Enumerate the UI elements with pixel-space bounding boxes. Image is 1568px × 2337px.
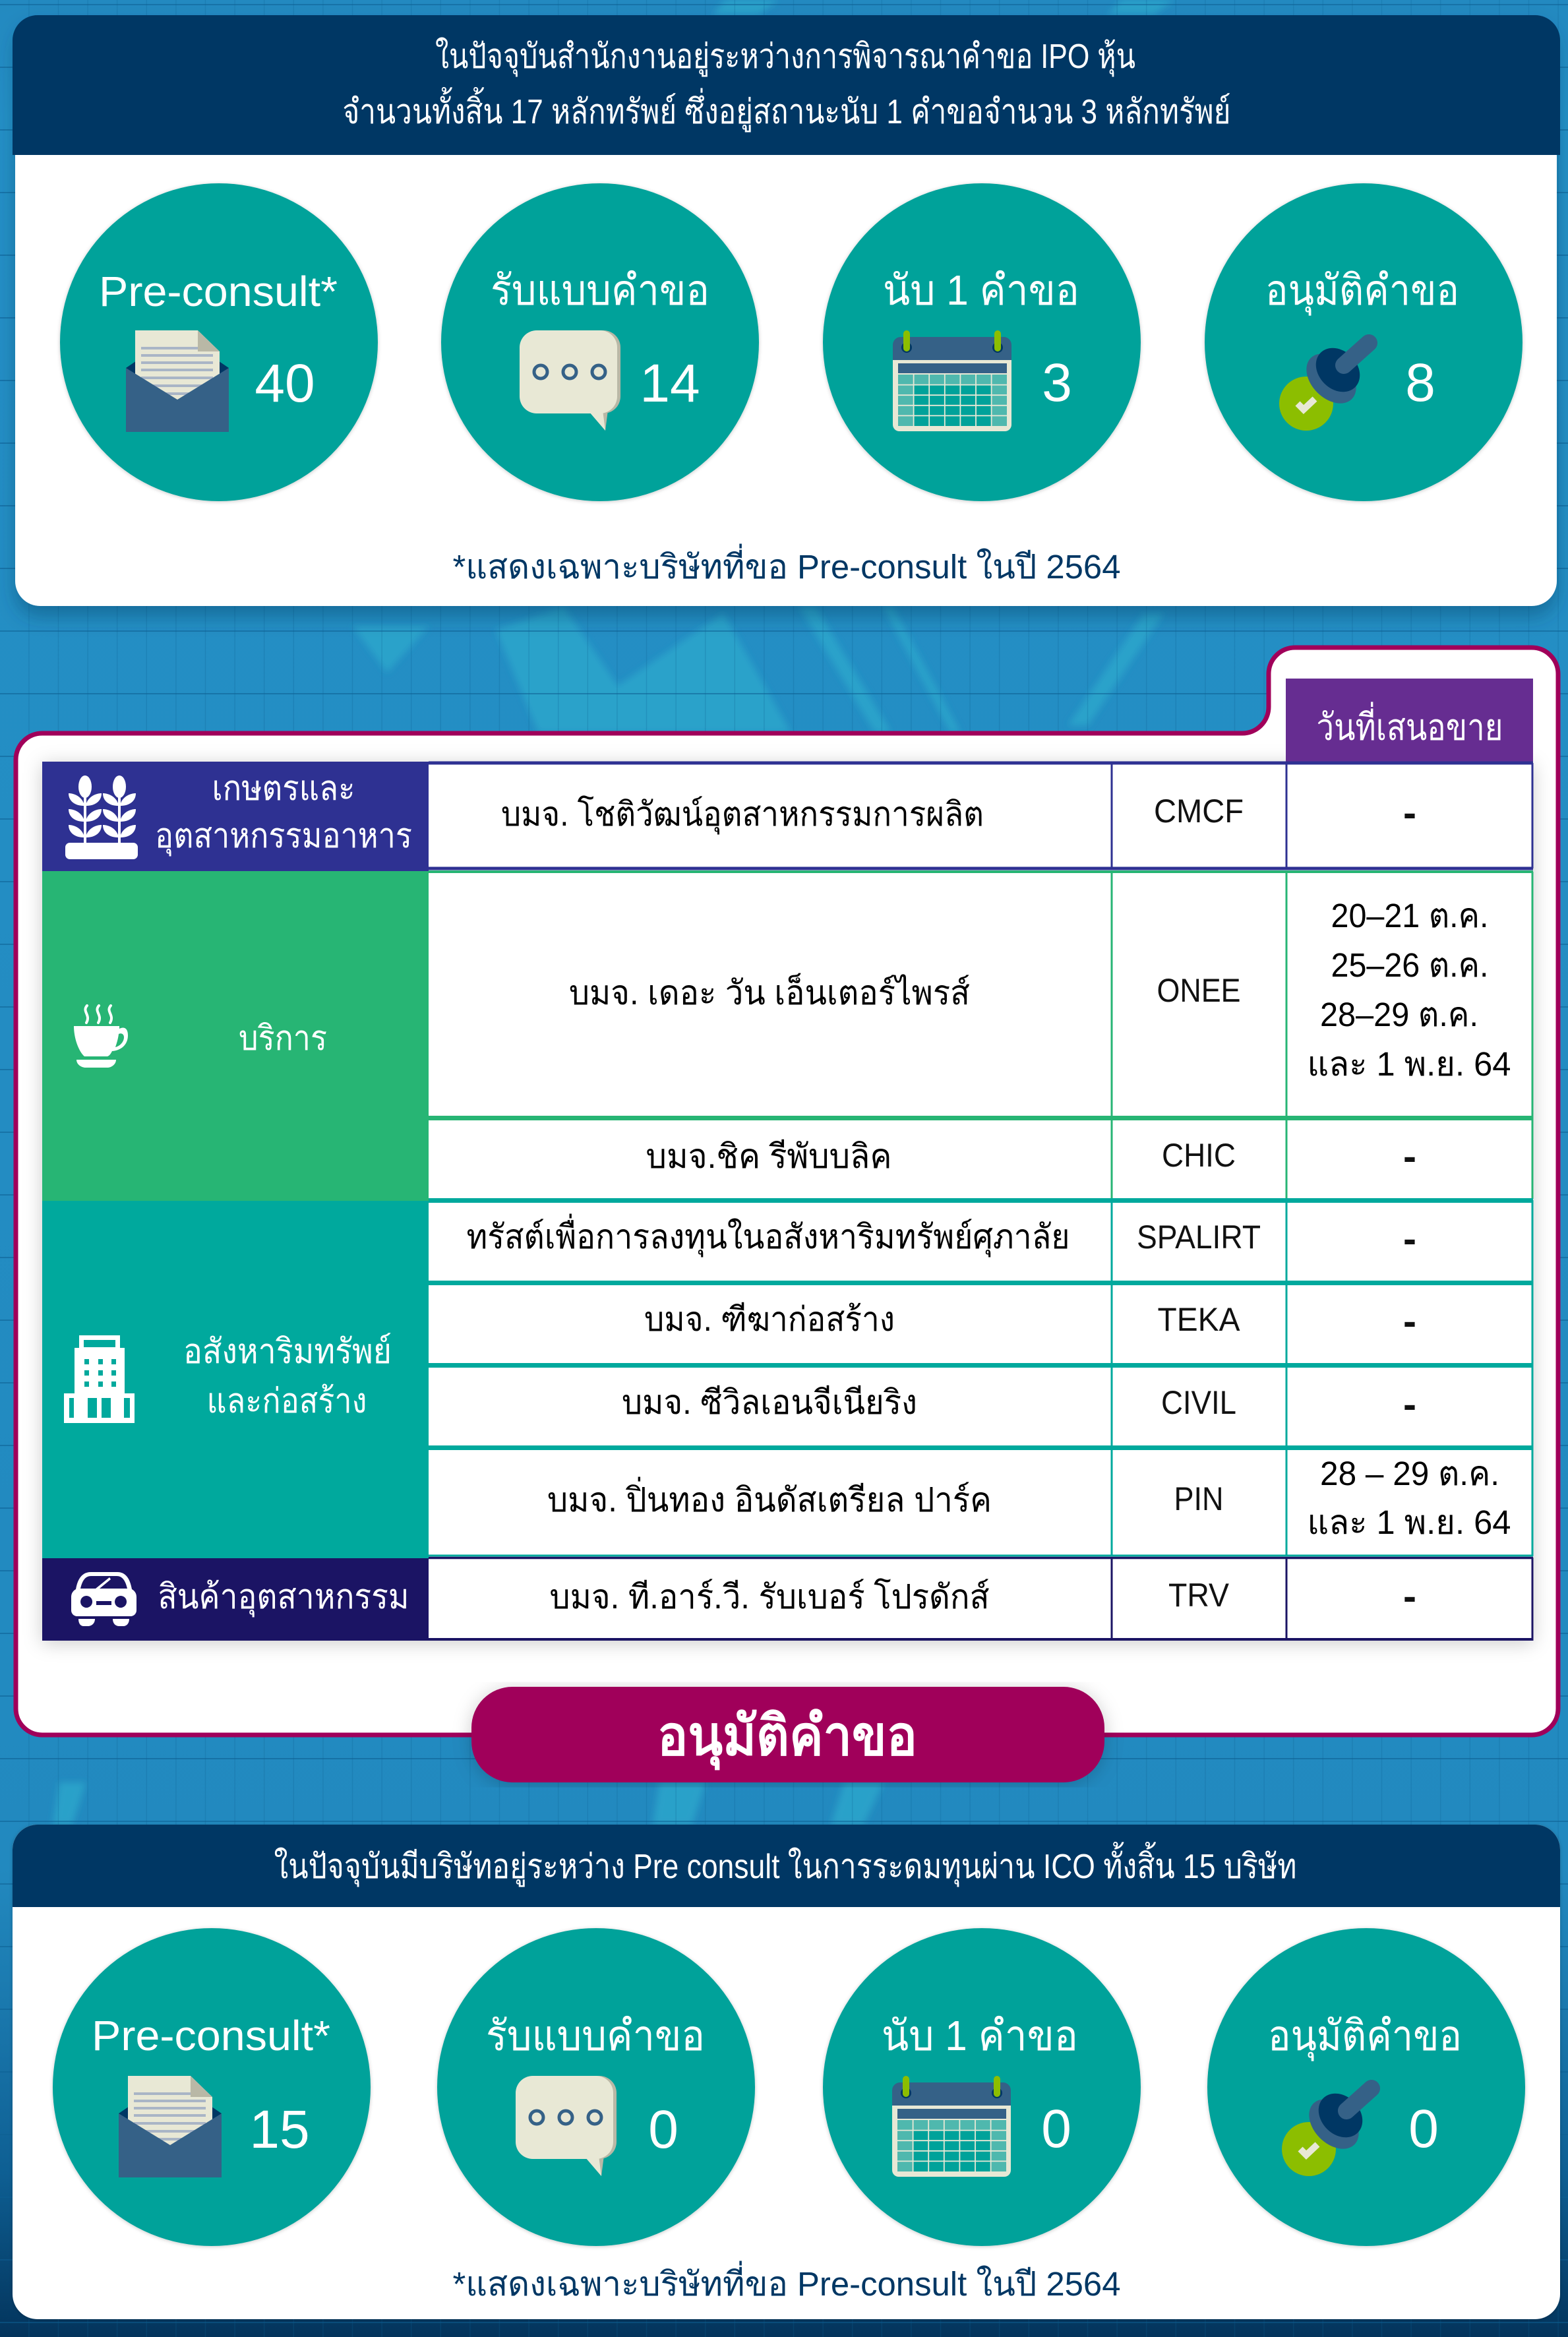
- row: CIVIL: CIVIL: [1161, 1384, 1236, 1421]
- row group: real estate: อสังหาริมทรัพย์: [183, 1333, 392, 1371]
- header: ICO summary: ในปัจจุบันมีบริษัทอยู่ระหว่าง Pre consult ในการระดมทุนผ่าน ICO ทั้งสิ้น 15 บริษัท: [274, 1842, 1296, 1887]
- stat: count one 3: [823, 183, 1141, 501]
- row group: services: บริการ: [239, 1019, 327, 1058]
- banner: approved: [471, 1687, 1104, 1782]
- stat: Pre-consult 15: [53, 1928, 371, 2246]
- row: TEKA: บมจ. ฑีฆาก่อสร้าง: [644, 1300, 895, 1338]
- stat: form received 14: 14: [640, 353, 700, 413]
- row: ONEE: ONEE: [1157, 972, 1241, 1009]
- stat: count one 0: 0: [1041, 2099, 1071, 2159]
- panel: ICO status: [13, 1825, 1560, 2319]
- row: PIN: PIN: [1174, 1480, 1224, 1517]
- row: TEKA: -: [1403, 1299, 1416, 1343]
- icon: coffee cup: [74, 1006, 128, 1068]
- stat: approved 8: 8: [1405, 353, 1435, 413]
- icon: envelope: [119, 2076, 222, 2177]
- icon: calendar: [892, 2079, 1011, 2177]
- stat: approved 8: [1205, 183, 1523, 501]
- row: SPALIRT: SPALIRT: [1137, 1219, 1261, 1256]
- icon: speech bubble: [516, 2076, 617, 2176]
- stat: approved 0: อนุมัติคำขอ: [1268, 2012, 1462, 2061]
- row: CHIC: บมจ.ชิค รีพับบลิค: [646, 1138, 891, 1175]
- stat: Pre-consult 40: Pre-consult*: [99, 268, 338, 315]
- row: TEKA: TEKA: [1158, 1301, 1240, 1338]
- row: PIN: และ 1 พ.ย. 64: [1307, 1503, 1511, 1541]
- row: ONEE: 28–29 ต.ค.: [1320, 996, 1478, 1033]
- stat: count one 0: [823, 1928, 1141, 2246]
- stat: count one 3: 3: [1042, 353, 1072, 413]
- stat: form received 0: รับแบบคำขอ: [486, 2012, 705, 2059]
- row: SPALIRT: [467, 1214, 1416, 1261]
- stat: approved 0: 0: [1408, 2099, 1439, 2159]
- stat: count one 0: นับ 1 คำขอ: [882, 2012, 1078, 2059]
- row: CHIC: -: [1403, 1134, 1416, 1178]
- row: TRV: [550, 1574, 1416, 1618]
- row: ONEE: และ 1 พ.ย. 64: [1307, 1045, 1511, 1083]
- banner: approved: อนุมัติคำขอ: [657, 1705, 917, 1771]
- panel outline with tab: [16, 648, 1558, 1735]
- row: TEKA: [644, 1299, 1416, 1343]
- stat: Pre-consult 40: 40: [255, 353, 315, 413]
- row: CIVIL: -: [1403, 1382, 1416, 1426]
- row: ONEE: [569, 897, 1511, 1083]
- row: PIN: บมจ. ปิ่นทอง อินดัสเตรียล ปาร์ค: [547, 1477, 992, 1519]
- panel: IPO status: [13, 15, 1560, 606]
- row group: agriculture: อุตสาหกรรมอาหาร: [155, 817, 412, 857]
- stat: form received 0: 0: [648, 2100, 678, 2160]
- row: CMCF: -: [1403, 791, 1416, 835]
- stat: form received 14: รับแบบคำขอ: [491, 266, 709, 314]
- stat: form received 0: [437, 1928, 755, 2246]
- row: SPALIRT: -: [1403, 1217, 1416, 1261]
- row: CMCF: บมจ. โชติวัฒน์อุตสาหกรรมการผลิต: [501, 795, 984, 835]
- row: ONEE: 25–26 ต.ค.: [1331, 946, 1489, 984]
- stat: approved 0: [1207, 1928, 1525, 2246]
- row: ONEE: บมจ. เดอะ วัน เอ็นเตอร์ไพรส์: [569, 973, 970, 1012]
- icon: wheat: [65, 775, 138, 859]
- icon: car: [71, 1572, 136, 1626]
- icon: building: [64, 1335, 135, 1423]
- row group: industrial: [42, 1558, 429, 1641]
- icon: calendar: [893, 334, 1011, 431]
- row: CHIC: CHIC: [1162, 1137, 1236, 1174]
- row: TRV: TRV: [1168, 1577, 1230, 1614]
- stat: approved 8: อนุมัติคำขอ: [1265, 266, 1459, 316]
- panel background: [13, 1825, 1560, 2319]
- icon: speech bubble: [520, 330, 620, 431]
- column header: offering date: วันที่เสนอขาย: [1316, 702, 1503, 748]
- panel: approved table: [16, 648, 1558, 1782]
- row: TRV: -: [1403, 1574, 1416, 1618]
- row: TRV: บมจ. ที.อาร์.วี. รับเบอร์ โปรดักส์: [550, 1578, 989, 1616]
- table grid: [429, 763, 1533, 1641]
- header: ICO summary: [13, 1825, 1560, 1907]
- icon: stamp: [1282, 2084, 1372, 2176]
- row: CIVIL: [622, 1382, 1416, 1426]
- row: CMCF: CMCF: [1154, 793, 1244, 830]
- row group: real estate: [42, 1201, 429, 1558]
- row: CIVIL: บมจ. ซีวิลเอนจีเนียริง: [622, 1383, 917, 1421]
- column header: offering date: [1286, 679, 1533, 763]
- stat: count one 3: นับ 1 คำขอ: [883, 266, 1079, 314]
- footnote: *แสดงเฉพาะบริษัทที่ขอ Pre-consult ในปี 2564: [452, 544, 1121, 586]
- stat: Pre-consult 15: 15: [249, 2100, 310, 2160]
- row group: industrial: สินค้าอุตสาหกรรม: [158, 1578, 409, 1618]
- header: IPO summary: จำนวนทั้งสิ้น 17 หลักทรัพย์ ซึ่งอยู่สถานะนับ 1 คำขอจำนวน 3 หลักทรัพย์: [343, 87, 1230, 133]
- row: SPALIRT: ทรัสต์เพื่อการลงทุนในอสังหาริมทรัพย์ศุภาลัย: [467, 1214, 1070, 1258]
- row: CMCF: [501, 791, 1416, 835]
- stat: form received 14: [441, 183, 759, 501]
- row: ONEE: 20–21 ต.ค.: [1331, 897, 1489, 934]
- table shadow: [42, 762, 1533, 1641]
- row group: agriculture: เกษตรและ: [212, 770, 355, 808]
- row: CHIC: [646, 1134, 1416, 1178]
- panel background: [15, 15, 1557, 606]
- stat: Pre-consult 40: [60, 183, 378, 501]
- header: IPO summary: [13, 15, 1560, 155]
- footnote: *แสดงเฉพาะบริษัทที่ขอ Pre-consult ในปี 2564: [452, 2261, 1121, 2303]
- row group: real estate: และก่อสร้าง: [207, 1382, 367, 1420]
- stat: Pre-consult 15: Pre-consult*: [92, 2012, 330, 2059]
- icon: envelope: [126, 330, 229, 432]
- row group: services: [42, 871, 429, 1201]
- row group: agriculture: [42, 762, 429, 871]
- header: IPO summary: ในปัจจุบันสำนักงานอยู่ระหว่างการพิจารณาคำขอ IPO หุ้น: [435, 37, 1135, 77]
- row: PIN: 28 – 29 ต.ค.: [1320, 1455, 1499, 1492]
- icon: stamp: [1279, 339, 1369, 431]
- row: PIN: [547, 1455, 1511, 1541]
